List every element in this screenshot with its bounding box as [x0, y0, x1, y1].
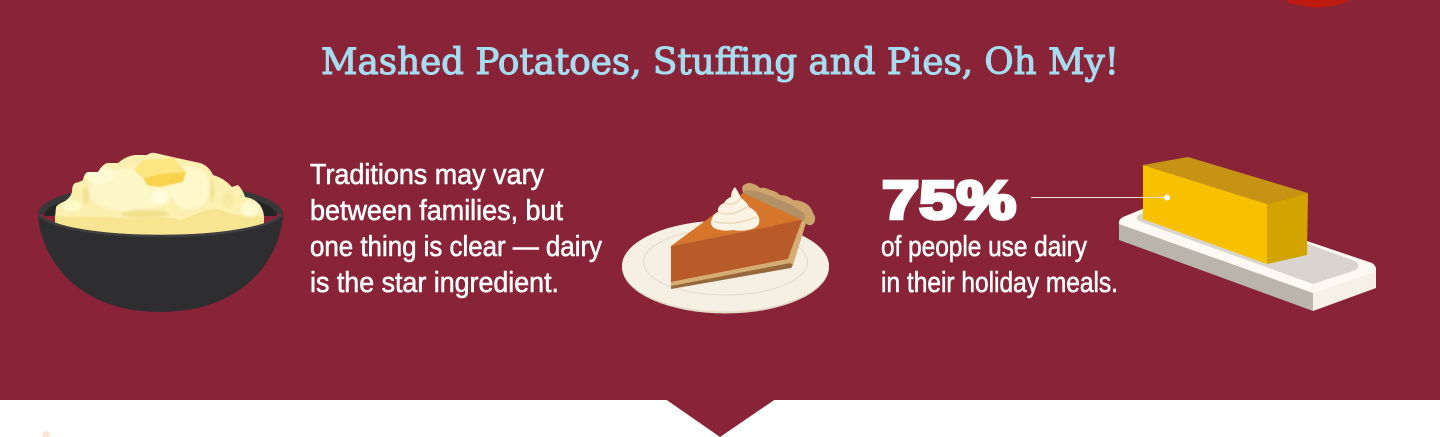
butter top — [1143, 157, 1308, 204]
bowl back rim — [38, 182, 283, 216]
body text: holiday meals — [881, 231, 1118, 299]
whipped cream — [711, 187, 759, 231]
icon: bowl of mashed potatoes — [38, 150, 283, 312]
butter front — [1143, 165, 1267, 264]
title: Mashed Potatoes, Stuffing and Pies, Oh My! — [321, 42, 1119, 83]
dish side left — [1119, 222, 1313, 311]
dish top — [1119, 196, 1376, 293]
butter side — [1267, 193, 1308, 264]
icon: slice of pumpkin pie on plate — [622, 183, 829, 314]
body text: holiday meals: in their holiday meals. — [881, 267, 1118, 299]
plate — [622, 220, 829, 314]
callout line with dot — [1031, 194, 1170, 200]
body text: traditions: one thing is clear — dairy — [310, 231, 602, 263]
dish inset — [1137, 212, 1358, 284]
body text: traditions: Traditions may vary — [310, 159, 544, 191]
butter pat — [134, 158, 186, 187]
body text: holiday meals: of people use dairy — [881, 231, 1087, 263]
mashed potato mound — [55, 152, 264, 235]
pie crust base — [671, 220, 806, 289]
stat: 75 percent: 75% — [882, 170, 1016, 230]
pie crust back — [742, 183, 815, 225]
body text: traditions: is the star ingredient. — [310, 267, 559, 299]
peach fragment at bottom edge — [42, 431, 50, 437]
bowl body — [38, 214, 283, 312]
bowl front lip — [39, 215, 282, 236]
pie filling top — [671, 193, 802, 246]
body text: traditions: between families, but — [310, 195, 563, 227]
pie filling front — [671, 220, 802, 282]
body text: traditions — [310, 159, 602, 299]
red fragment at top edge — [1287, 0, 1349, 8]
icon: stick of butter on dish — [1119, 157, 1376, 311]
dish side right — [1313, 267, 1376, 311]
